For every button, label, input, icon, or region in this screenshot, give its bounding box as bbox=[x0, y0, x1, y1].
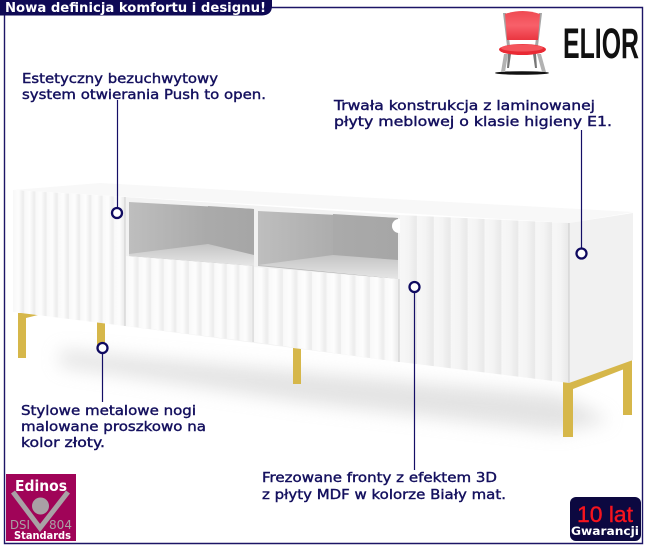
callout: milled fronts bbox=[262, 282, 506, 503]
text: push to open: Estetyczny bezuchwytowy bbox=[22, 72, 218, 87]
right door bbox=[400, 215, 569, 383]
left drawer bbox=[126, 256, 253, 342]
callout: push to open bbox=[22, 72, 266, 218]
text: metal legs: Stylowe metalowe nogi bbox=[21, 404, 196, 419]
top surface bbox=[13, 183, 634, 223]
text: milled fronts: Frezowane fronty z efektem 3D bbox=[262, 471, 497, 486]
text: push to open: system otwierania Push to open. bbox=[22, 88, 266, 103]
badge: 10 year warranty bbox=[570, 497, 641, 541]
text: metal legs: malowane proszkowo na bbox=[21, 420, 206, 435]
floor shadow bbox=[60, 350, 610, 432]
furniture: TV cabinet bbox=[13, 183, 634, 437]
badge: 10 year warranty: Gwarancji bbox=[571, 524, 639, 538]
header banner: Nowa definicja komfortu i designu! bbox=[5, 1, 266, 16]
middle drawer bbox=[254, 267, 399, 362]
badge: Edinos standards: DSI bbox=[10, 518, 30, 532]
icon: red chair bbox=[495, 11, 549, 75]
text: metal legs: kolor złoty. bbox=[21, 436, 105, 451]
text: construction: Trwała konstrukcja z laminowanej bbox=[333, 99, 595, 114]
text: construction: płyty meblowej o klasie higieny E1. bbox=[334, 115, 612, 130]
callout: metal legs bbox=[21, 343, 206, 451]
badge: Edinos standards: Standards bbox=[14, 530, 71, 542]
callout: construction bbox=[333, 99, 612, 258]
left door bbox=[13, 190, 125, 326]
logo: Elior chair and wordmark bbox=[495, 11, 639, 75]
badge: Edinos standards: Edinos bbox=[15, 477, 67, 495]
body behind the fronts bbox=[125, 197, 400, 362]
badge: 10 year warranty: 10 lat bbox=[577, 502, 633, 527]
text: milled fronts: z płyty MDF w kolorze Biały mat. bbox=[262, 488, 506, 503]
side panel bbox=[569, 213, 633, 383]
badge: Edinos standards: 804 bbox=[49, 518, 72, 532]
niche left bbox=[129, 202, 254, 266]
badge: Edinos standards bbox=[6, 474, 76, 542]
gold legs bbox=[18, 313, 632, 437]
niche right bbox=[258, 211, 406, 279]
